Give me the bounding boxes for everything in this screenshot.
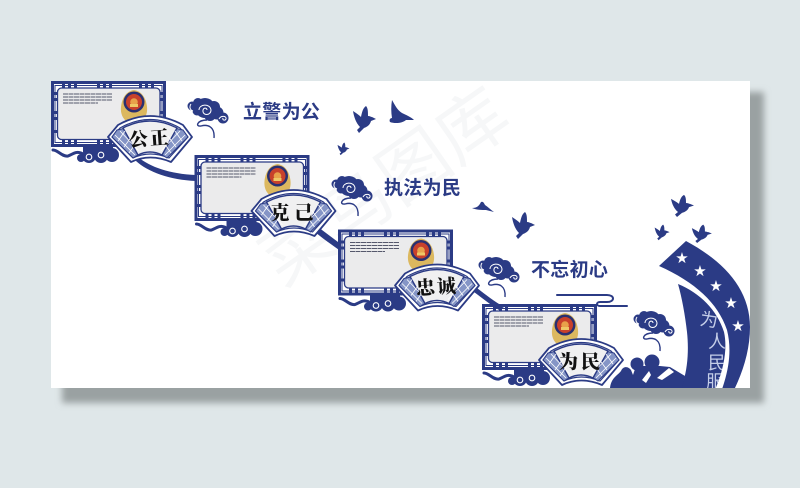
- step 3: frame with badge and fan: [338, 230, 479, 312]
- stars: ★: [709, 277, 723, 295]
- heading: 执法为民: 执法为民: [384, 177, 461, 199]
- stars: ★: [731, 317, 745, 335]
- heading: 不忘初心: 不忘初心: [531, 258, 608, 281]
- watermark: 菜鸟图库: [247, 73, 524, 300]
- connector ribbon 1: [136, 157, 196, 181]
- stars: [675, 249, 745, 335]
- step 4: frame with badge and fan: [482, 304, 623, 386]
- fan label: 为民: [559, 347, 603, 374]
- icon: cloud 4: [634, 311, 674, 351]
- step 2: frame with badge and fan: [194, 155, 336, 237]
- silhouettes of people: [610, 354, 685, 388]
- panel shadow: [62, 92, 764, 403]
- vertical slogan: 服: [706, 372, 724, 392]
- fan label: 公正: [128, 123, 172, 152]
- fan label: 克己: [270, 198, 319, 225]
- swirl line decoration: [557, 295, 627, 306]
- connector ribbon 3: [474, 288, 504, 310]
- stars: ★: [724, 294, 738, 312]
- white wall panel: [51, 81, 750, 388]
- crescent: [678, 284, 725, 392]
- vertical slogan: [700, 310, 726, 388]
- fan label: 忠诚: [415, 271, 459, 301]
- step 1: frame with badge and fan: [51, 81, 192, 163]
- star band: [659, 241, 750, 392]
- stars: ★: [693, 262, 707, 280]
- vertical slogan: 为: [699, 309, 719, 331]
- vertical slogan: 民: [708, 353, 726, 373]
- stars: ★: [675, 249, 689, 267]
- star arc with slogan: [610, 241, 750, 392]
- vertical slogan: 人: [708, 332, 726, 352]
- icon: cloud 2: [332, 176, 372, 216]
- icon: cloud 1: [188, 98, 228, 138]
- flock of birds: [338, 100, 712, 243]
- connector ribbon 2: [315, 227, 342, 252]
- icon: cloud 3: [478, 257, 520, 297]
- heading: 立警为公: 立警为公: [243, 100, 320, 123]
